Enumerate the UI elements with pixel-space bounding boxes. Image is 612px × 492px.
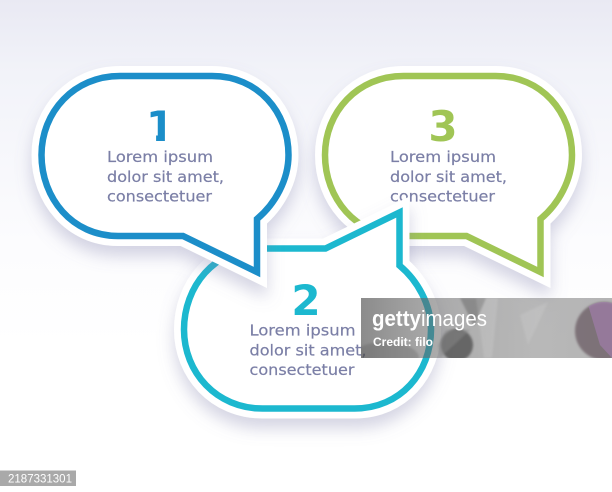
watermark banner	[361, 298, 612, 358]
text block 2: dolor sit amet,	[250, 342, 366, 360]
text block 1: consectetuer	[107, 188, 213, 206]
image id tag	[0, 470, 76, 486]
text block 3: dolor sit amet,	[390, 168, 507, 186]
panel: speech bubble 2	[184, 212, 431, 408]
text block 3: Lorem ipsum	[390, 148, 496, 166]
text block 2: consectetuer	[250, 361, 355, 379]
text block 2: Lorem ipsum	[250, 322, 356, 340]
text block 1: dolor sit amet,	[107, 168, 224, 186]
text block 3: consectetuer	[390, 188, 496, 206]
image id tag: 2187331301	[8, 474, 72, 486]
text block 2	[250, 322, 366, 379]
watermark credit: Credit: filo	[373, 335, 433, 349]
bubble 3 shape	[325, 76, 572, 272]
text block 1	[107, 148, 224, 206]
number 3: 3	[428, 102, 458, 151]
bubble 2 shape	[184, 212, 431, 408]
number 1: 1	[146, 102, 175, 151]
watermark logo text: gettyimages	[372, 306, 487, 331]
text block 3	[390, 148, 507, 206]
number 2: 2	[291, 276, 321, 325]
bubble 1 shape	[42, 76, 288, 272]
panel: speech bubble 1	[42, 76, 288, 272]
panel: speech bubble 3	[325, 76, 572, 272]
text block 1: Lorem ipsum	[107, 148, 213, 166]
